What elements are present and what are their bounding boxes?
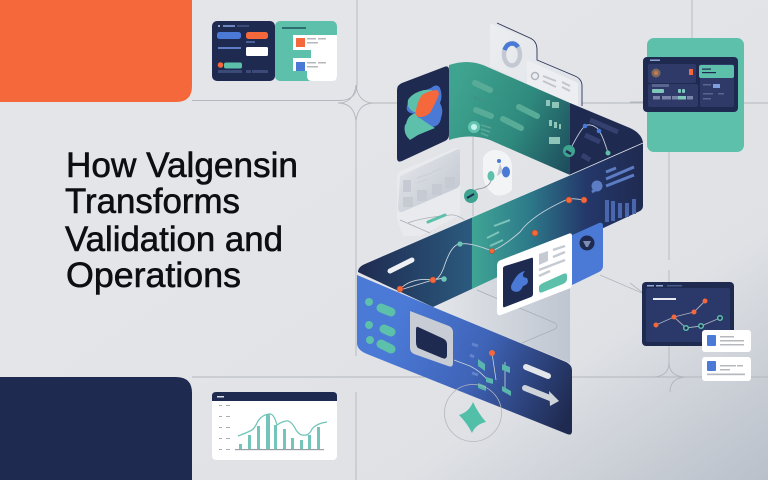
top ribbon: navy section with line chart	[563, 103, 643, 175]
legend card 1	[702, 330, 751, 352]
orange corner panel	[0, 0, 192, 102]
ribbon charts	[400, 199, 584, 289]
middle ribbon	[358, 143, 643, 307]
title: Operations	[66, 256, 241, 295]
title: Validation and	[65, 220, 283, 259]
navy panel	[212, 21, 275, 81]
panel lines right	[592, 167, 634, 192]
title: How Valgensin	[66, 146, 298, 185]
bars	[239, 414, 320, 450]
bottom-right chart card	[642, 282, 734, 346]
donut chart	[504, 44, 520, 66]
top ribbon: green section	[449, 62, 570, 175]
grid lines	[192, 0, 768, 480]
circled teal star	[444, 384, 502, 442]
light left panel	[397, 148, 470, 236]
ribbon pill	[390, 260, 412, 271]
line	[238, 414, 327, 436]
small white process tile	[464, 150, 512, 203]
flow diagram	[454, 353, 505, 390]
blob art	[407, 86, 442, 127]
white feature card	[497, 233, 572, 315]
labels on ribbon	[475, 83, 537, 128]
title	[65, 146, 298, 295]
navy square card with blob	[397, 66, 449, 162]
top-left dashboard thumbnail	[212, 21, 337, 81]
navy dashboard	[643, 57, 738, 112]
teal backing	[647, 38, 744, 152]
bottom-left chart card	[212, 392, 337, 460]
window thumbnail	[410, 311, 453, 367]
chart lines	[656, 301, 720, 328]
glowing point	[468, 121, 480, 133]
teal connector node	[464, 189, 478, 203]
arrow	[526, 367, 548, 376]
glass panel below middle ribbon	[433, 240, 570, 363]
card	[212, 392, 337, 460]
shield icon on blue card	[580, 236, 594, 250]
front ribbon	[357, 275, 572, 435]
navy corner panel	[0, 377, 192, 480]
title: Transforms	[65, 182, 240, 221]
blue splat on navy tile	[503, 258, 533, 307]
legend card 2	[702, 357, 751, 381]
top-right teal card with dashboard	[643, 38, 744, 152]
text rows	[539, 251, 548, 265]
teal status rows	[365, 298, 374, 344]
teal node	[563, 145, 575, 157]
donut back panel	[490, 23, 582, 108]
teal panel	[275, 21, 337, 81]
blue card behind white card	[570, 223, 603, 286]
